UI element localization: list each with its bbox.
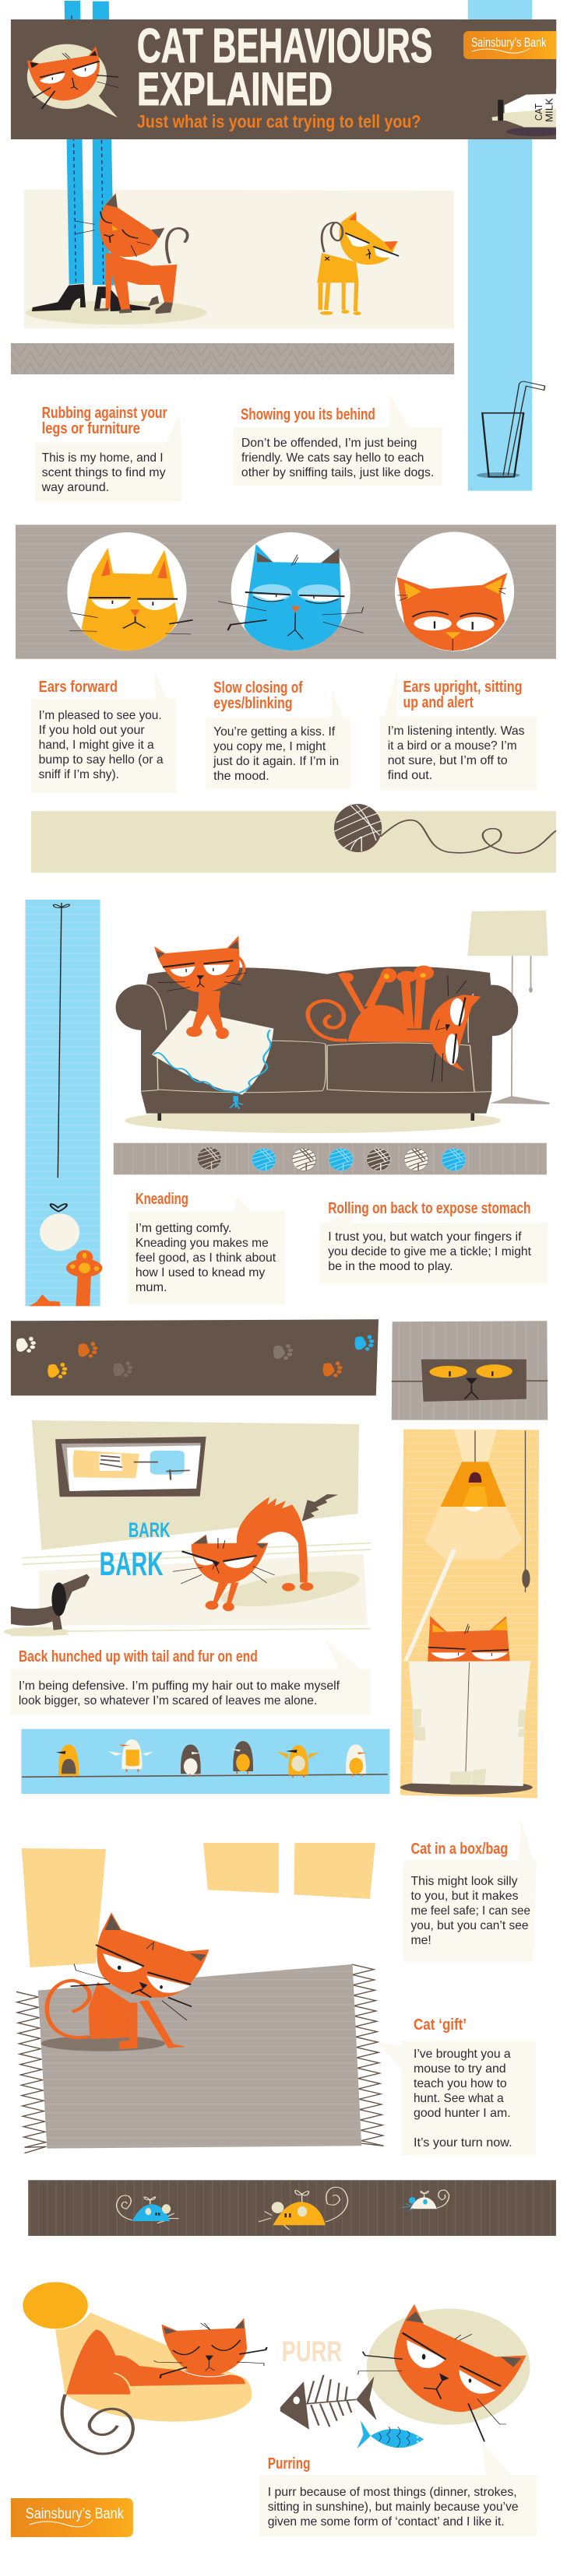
illustration: sleeping cat in the sun bbox=[23, 2282, 267, 2454]
panel: three cat faces bbox=[16, 525, 556, 659]
body text: This is my home, and I bbox=[42, 451, 164, 465]
body text: I’ve brought you a bbox=[414, 2048, 511, 2061]
purr sound effect: PURR bbox=[282, 2336, 342, 2367]
body text: feel good, as I think about bbox=[136, 1251, 276, 1265]
icon: cat face speech bubble bbox=[27, 44, 118, 118]
illustration: legs and orange cat rubbing bbox=[24, 1, 454, 329]
body text bbox=[19, 1679, 340, 1707]
heading: eyes/blinking bbox=[213, 695, 293, 712]
panel: showing you its behind bbox=[233, 395, 442, 486]
bark sound effects: BARK bbox=[100, 1546, 164, 1583]
body text: mouse to try and bbox=[414, 2062, 506, 2076]
panel: ears upright, sitting up and alert bbox=[379, 670, 537, 790]
panel: ears forward bbox=[30, 671, 176, 793]
panel: window with blind cord bbox=[25, 900, 102, 1306]
heading: Kneading bbox=[136, 1191, 188, 1208]
body text: look bigger, so whatever I’m scared of leaves me alone. bbox=[19, 1694, 317, 1707]
body text: I trust you, but watch your fingers if bbox=[328, 1230, 522, 1244]
illustration: happy cat face with fish bbox=[280, 2304, 530, 2449]
cat face bbox=[358, 2304, 526, 2441]
body text: This might look silly bbox=[410, 1875, 518, 1888]
illustration: wall with framed picture bbox=[32, 1420, 359, 1550]
body text: friendly. We cats say hello to each bbox=[241, 451, 424, 465]
icon: wool ball and string bbox=[334, 804, 556, 853]
panel: rubbing against your legs or furniture bbox=[35, 405, 181, 502]
body text: I’m getting comfy. bbox=[136, 1222, 232, 1235]
icon: cat milk bottle: MILK bbox=[543, 98, 555, 122]
body text: not sure, but I’m off to bbox=[388, 754, 508, 767]
logo: Sainsbury's Bank footer bbox=[11, 2498, 133, 2537]
title: EXPLAINED bbox=[137, 63, 333, 115]
body text bbox=[136, 1222, 276, 1294]
heading: Ears forward bbox=[39, 679, 118, 696]
floor lamp bbox=[467, 911, 550, 1104]
floor shadow bbox=[125, 1108, 501, 1133]
body text: other by sniffing tails, just like dogs. bbox=[241, 466, 434, 479]
heading: legs or furniture bbox=[42, 420, 140, 437]
panel: slow closing of eyes/blinking bbox=[206, 679, 350, 789]
illustration: yellow cat showing behind bbox=[317, 212, 399, 315]
body text: you decide to give me a tickle; I might bbox=[328, 1245, 532, 1258]
heading bbox=[403, 679, 523, 711]
illustration: dark cat face window bbox=[392, 1321, 548, 1420]
panel: milk glass column bbox=[468, 0, 545, 491]
bark sound effects bbox=[100, 1518, 171, 1583]
body text: hunt. See what a bbox=[414, 2092, 504, 2105]
orange cat rolling on back bbox=[308, 966, 481, 1082]
body text: you, but you can’t see bbox=[410, 1919, 529, 1932]
body text: Kneading you makes me bbox=[136, 1237, 269, 1250]
subtitle: Just what is your cat trying to tell you? bbox=[137, 111, 421, 132]
decorative band: clockwork mice bbox=[28, 2180, 556, 2236]
cardboard box bbox=[400, 1549, 533, 1795]
body text: teach you how to bbox=[414, 2077, 507, 2090]
body text: hand, I might give it a bbox=[39, 739, 154, 752]
body text: I’m pleased to see you. bbox=[39, 709, 162, 722]
heading: Ears upright, sitting bbox=[403, 679, 523, 696]
illustration: hunched cat and barking dog bbox=[4, 1494, 371, 1637]
icon: pendant lamp bbox=[440, 1462, 506, 1511]
heading: Cat in a box/bag bbox=[410, 1841, 508, 1858]
icon: cat milk bottle: CAT bbox=[533, 104, 544, 121]
icon: sun bbox=[23, 2282, 88, 2329]
body text bbox=[328, 1230, 532, 1273]
heading: Slow closing of bbox=[213, 679, 303, 697]
body text bbox=[39, 709, 164, 781]
body text bbox=[41, 451, 166, 494]
orange cat sleeping bbox=[62, 2318, 267, 2454]
heading: Cat ‘gift’ bbox=[414, 2016, 467, 2034]
icon: cat milk bottle bbox=[491, 88, 567, 140]
body text: to you, but it makes bbox=[410, 1890, 519, 1903]
logo: Sainsbury's Bank bbox=[463, 31, 556, 59]
bark sound effects: BARK bbox=[129, 1518, 171, 1542]
dog bbox=[11, 1574, 90, 1630]
panel: purring bbox=[259, 2442, 537, 2536]
blanket bbox=[152, 1010, 273, 1109]
body text: me feel safe; I can see bbox=[410, 1904, 530, 1918]
heading: up and alert bbox=[403, 694, 474, 711]
body text: Don’t be offended, I’m just being bbox=[241, 437, 417, 450]
body text: the mood. bbox=[213, 770, 269, 783]
header banner bbox=[11, 19, 567, 140]
panel: kneading bbox=[128, 1191, 285, 1304]
body text: be in the mood to play. bbox=[328, 1260, 453, 1273]
body text bbox=[410, 1875, 530, 1947]
body text bbox=[388, 725, 525, 782]
heading bbox=[42, 405, 167, 437]
body text: it a bird or a mouse? I’m bbox=[388, 739, 517, 753]
panel: band with wool ball bbox=[31, 804, 556, 872]
body text: bump to say hello (or a bbox=[39, 753, 164, 767]
icon: blue cat face, slow blink bbox=[218, 532, 364, 651]
title bbox=[137, 19, 432, 115]
decorative band: row of wool balls bbox=[114, 1143, 547, 1174]
orange cat bbox=[47, 1912, 209, 2049]
decorative band: paw prints bbox=[11, 1319, 379, 1395]
body text: you copy me, I might bbox=[213, 740, 326, 753]
body text: It’s your turn now. bbox=[414, 2136, 512, 2150]
body text: find out. bbox=[388, 769, 432, 782]
illustration: lamp and cat in a box bbox=[400, 1430, 539, 1799]
icon: blue fish bbox=[357, 2420, 424, 2449]
panel: back hunched up bbox=[11, 1639, 371, 1715]
body text: scent things to find my bbox=[42, 466, 166, 479]
panel: cat gift bbox=[378, 2016, 536, 2156]
icon: glass and straw bbox=[477, 381, 545, 478]
rug bbox=[16, 1964, 384, 2153]
illustration: sofa with kneading and rolling cats bbox=[116, 911, 550, 1133]
icon: fish bone bbox=[280, 2375, 377, 2430]
body text: given me some form of ‘contact’ and I like it. bbox=[268, 2515, 505, 2529]
sofa bbox=[116, 967, 518, 1121]
body text bbox=[414, 2048, 512, 2150]
icon: yellow cat face, ears forward bbox=[67, 532, 192, 651]
body text bbox=[213, 725, 339, 783]
orange cat peeking from box bbox=[428, 1616, 510, 1662]
title: CAT BEHAVIOURS bbox=[137, 19, 432, 73]
icon: cord bobble and paw reaching bbox=[29, 1204, 102, 1306]
icon: orange cat face, ears upright bbox=[395, 532, 514, 651]
body text: You’re getting a kiss. If bbox=[213, 725, 336, 739]
heading bbox=[213, 679, 303, 712]
orange hunched cat bbox=[173, 1494, 338, 1611]
body text bbox=[241, 437, 434, 479]
orange cat kneading bbox=[154, 935, 247, 1039]
body text bbox=[268, 2486, 519, 2529]
body text: sitting in sunshine), but mainly because you’ve bbox=[268, 2501, 519, 2514]
body text: If you hold out your bbox=[39, 724, 145, 737]
body text: I purr because of most things (dinner, strokes, bbox=[268, 2486, 517, 2499]
heading: Purring bbox=[268, 2455, 310, 2472]
body text: I’m listening intently. Was bbox=[388, 725, 525, 738]
decorative band: birds on a wire bbox=[21, 1729, 389, 1794]
body text: sniff if I’m shy). bbox=[39, 768, 119, 781]
body text: mum. bbox=[136, 1281, 167, 1294]
heading: Back hunched up with tail and fur on end bbox=[19, 1648, 258, 1665]
illustration: sunlight, rug and scratching cat bbox=[16, 1843, 384, 2153]
decorative band bbox=[11, 343, 454, 374]
body text: just do it again. If I’m in bbox=[213, 755, 339, 768]
panel: rolling on back bbox=[320, 1200, 548, 1284]
body text: I’m being defensive. I’m puffing my hair out to make myself bbox=[19, 1679, 340, 1693]
panel: cat in a box/bag bbox=[403, 1819, 537, 1962]
body text: way around. bbox=[41, 481, 109, 494]
heading: Showing you its behind bbox=[241, 406, 375, 423]
body text: good hunter I am. bbox=[414, 2107, 511, 2120]
body text: how I used to knead my bbox=[136, 1266, 265, 1279]
logo: Sainsbury's Bank footer: Sainsbury’s Bank bbox=[26, 2506, 124, 2522]
body text: me! bbox=[410, 1934, 431, 1947]
heading: Rubbing against your bbox=[42, 405, 167, 422]
